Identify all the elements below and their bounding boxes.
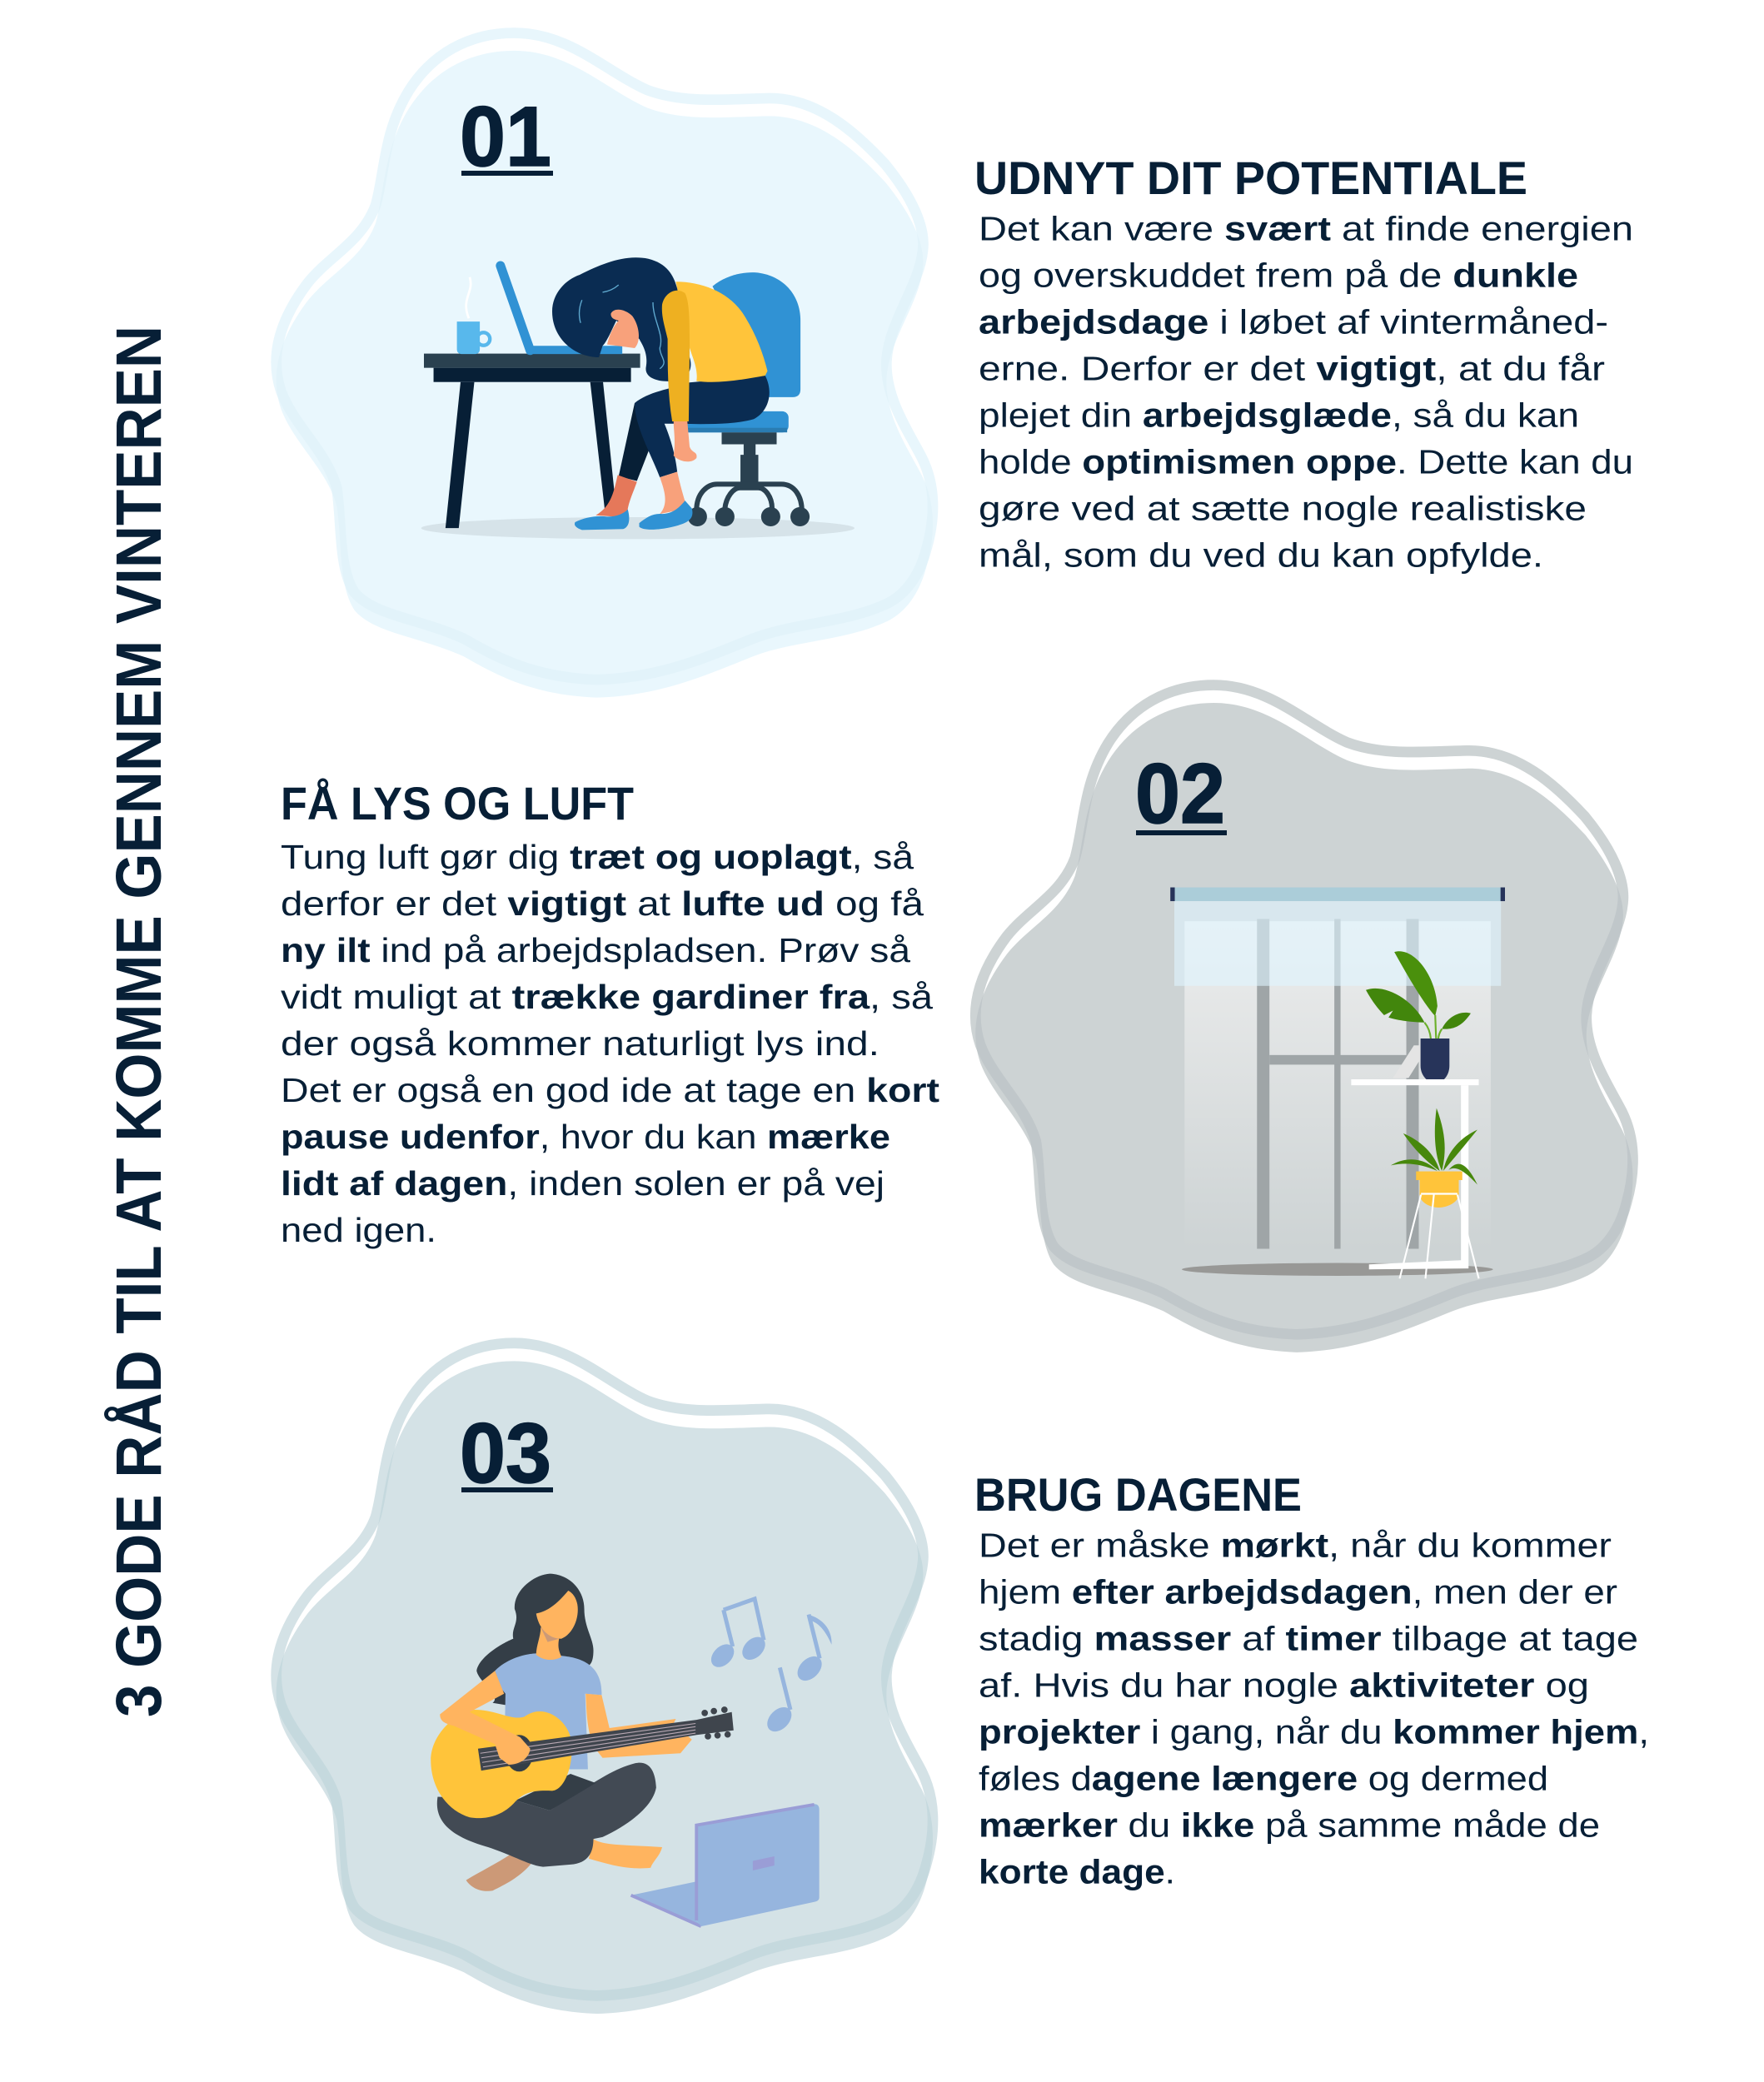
text block 1: og overskuddet frem på de dunkle [979, 256, 1578, 294]
text block 1: mål, som du ved du kan opfylde. [979, 535, 1543, 574]
text block 1: erne. Derfor er det vigtigt , at du får [979, 349, 1605, 387]
blob background 02 [975, 685, 1632, 1352]
text block 3: projekter i gang, når du kommer hjem , [979, 1712, 1649, 1751]
text block 3: BRUG DAGENE [974, 1468, 1302, 1521]
text block 2: lidt af dagen , inden solen er på vej [281, 1164, 884, 1203]
illustration: window with curtain [1170, 888, 1505, 1276]
text block 3: mærker du ikke på samme måde de [979, 1806, 1600, 1844]
text block 2: vidt muligt at trække gardiner fra , så [281, 978, 933, 1016]
text block 2: Tung luft gør dig træt og uoplagt , så [281, 838, 914, 876]
panel 02: blob with window and plants [975, 685, 1632, 1352]
text block 2: der også kommer naturligt lys ind. [281, 1024, 880, 1063]
text block 3: hjem efter arbejdsdagen , men der er [979, 1572, 1617, 1611]
text block 1: gøre ved at sætte nogle realistiske [979, 489, 1587, 527]
text block 3: føles d agene længere og dermed [979, 1759, 1548, 1797]
text block 1 [974, 152, 1633, 574]
number 01: 01 [460, 89, 551, 184]
text block 2: ned igen. [281, 1211, 436, 1249]
text block 1: arbejdsdage i løbet af vintermåned- [979, 302, 1608, 341]
number 03: 03 [460, 1406, 551, 1501]
text block 3: Det er måske mørkt , når du kommer [979, 1526, 1612, 1564]
panel 01: blob with tired woman at desk [277, 33, 933, 698]
text block 1: holde optimismen oppe . Dette kan du [979, 442, 1633, 481]
text block 3: stadig masser af timer tilbage at tage [979, 1619, 1638, 1657]
text block 1: UDNYT DIT POTENTIALE [974, 152, 1527, 204]
text block 2: derfor er det vigtigt at lufte ud og få [281, 884, 924, 923]
text block 2: ny ilt ind på arbejdspladsen. Prøv så [281, 931, 910, 969]
panel 03: blob with woman playing guitar [277, 1343, 933, 2014]
text block 2: pause udenfor , hvor du kan mærke [281, 1118, 890, 1156]
text block 2: FÅ LYS OG LUFT [281, 777, 634, 829]
illustration: side table with plants [1351, 951, 1479, 1278]
icon: open laptop [631, 1804, 820, 1926]
blob background 01 [277, 33, 933, 698]
illustration: woman with guitar [431, 1574, 734, 1891]
text block 3: korte dage . [979, 1852, 1175, 1890]
text block 1: plejet din arbejdsglæde , så du kan [979, 396, 1579, 434]
blob background 03 [277, 1343, 933, 2014]
text block 3 [974, 1468, 1649, 1890]
text block 1: Det kan være svært at finde energien [979, 209, 1633, 247]
icon: music notes [707, 1599, 832, 1736]
text block 2 [281, 777, 939, 1249]
text block 3: af. Hvis du har nogle aktiviteter og [979, 1666, 1589, 1704]
text block 2: Det er også en god ide at tage en kort [281, 1071, 939, 1109]
vertical title: 3 GODE RÅD TIL AT KOMME GENNEM VINTEREN [103, 326, 175, 1717]
illustration: woman slumped over desk [421, 257, 855, 539]
number 02: 02 [1135, 746, 1225, 841]
